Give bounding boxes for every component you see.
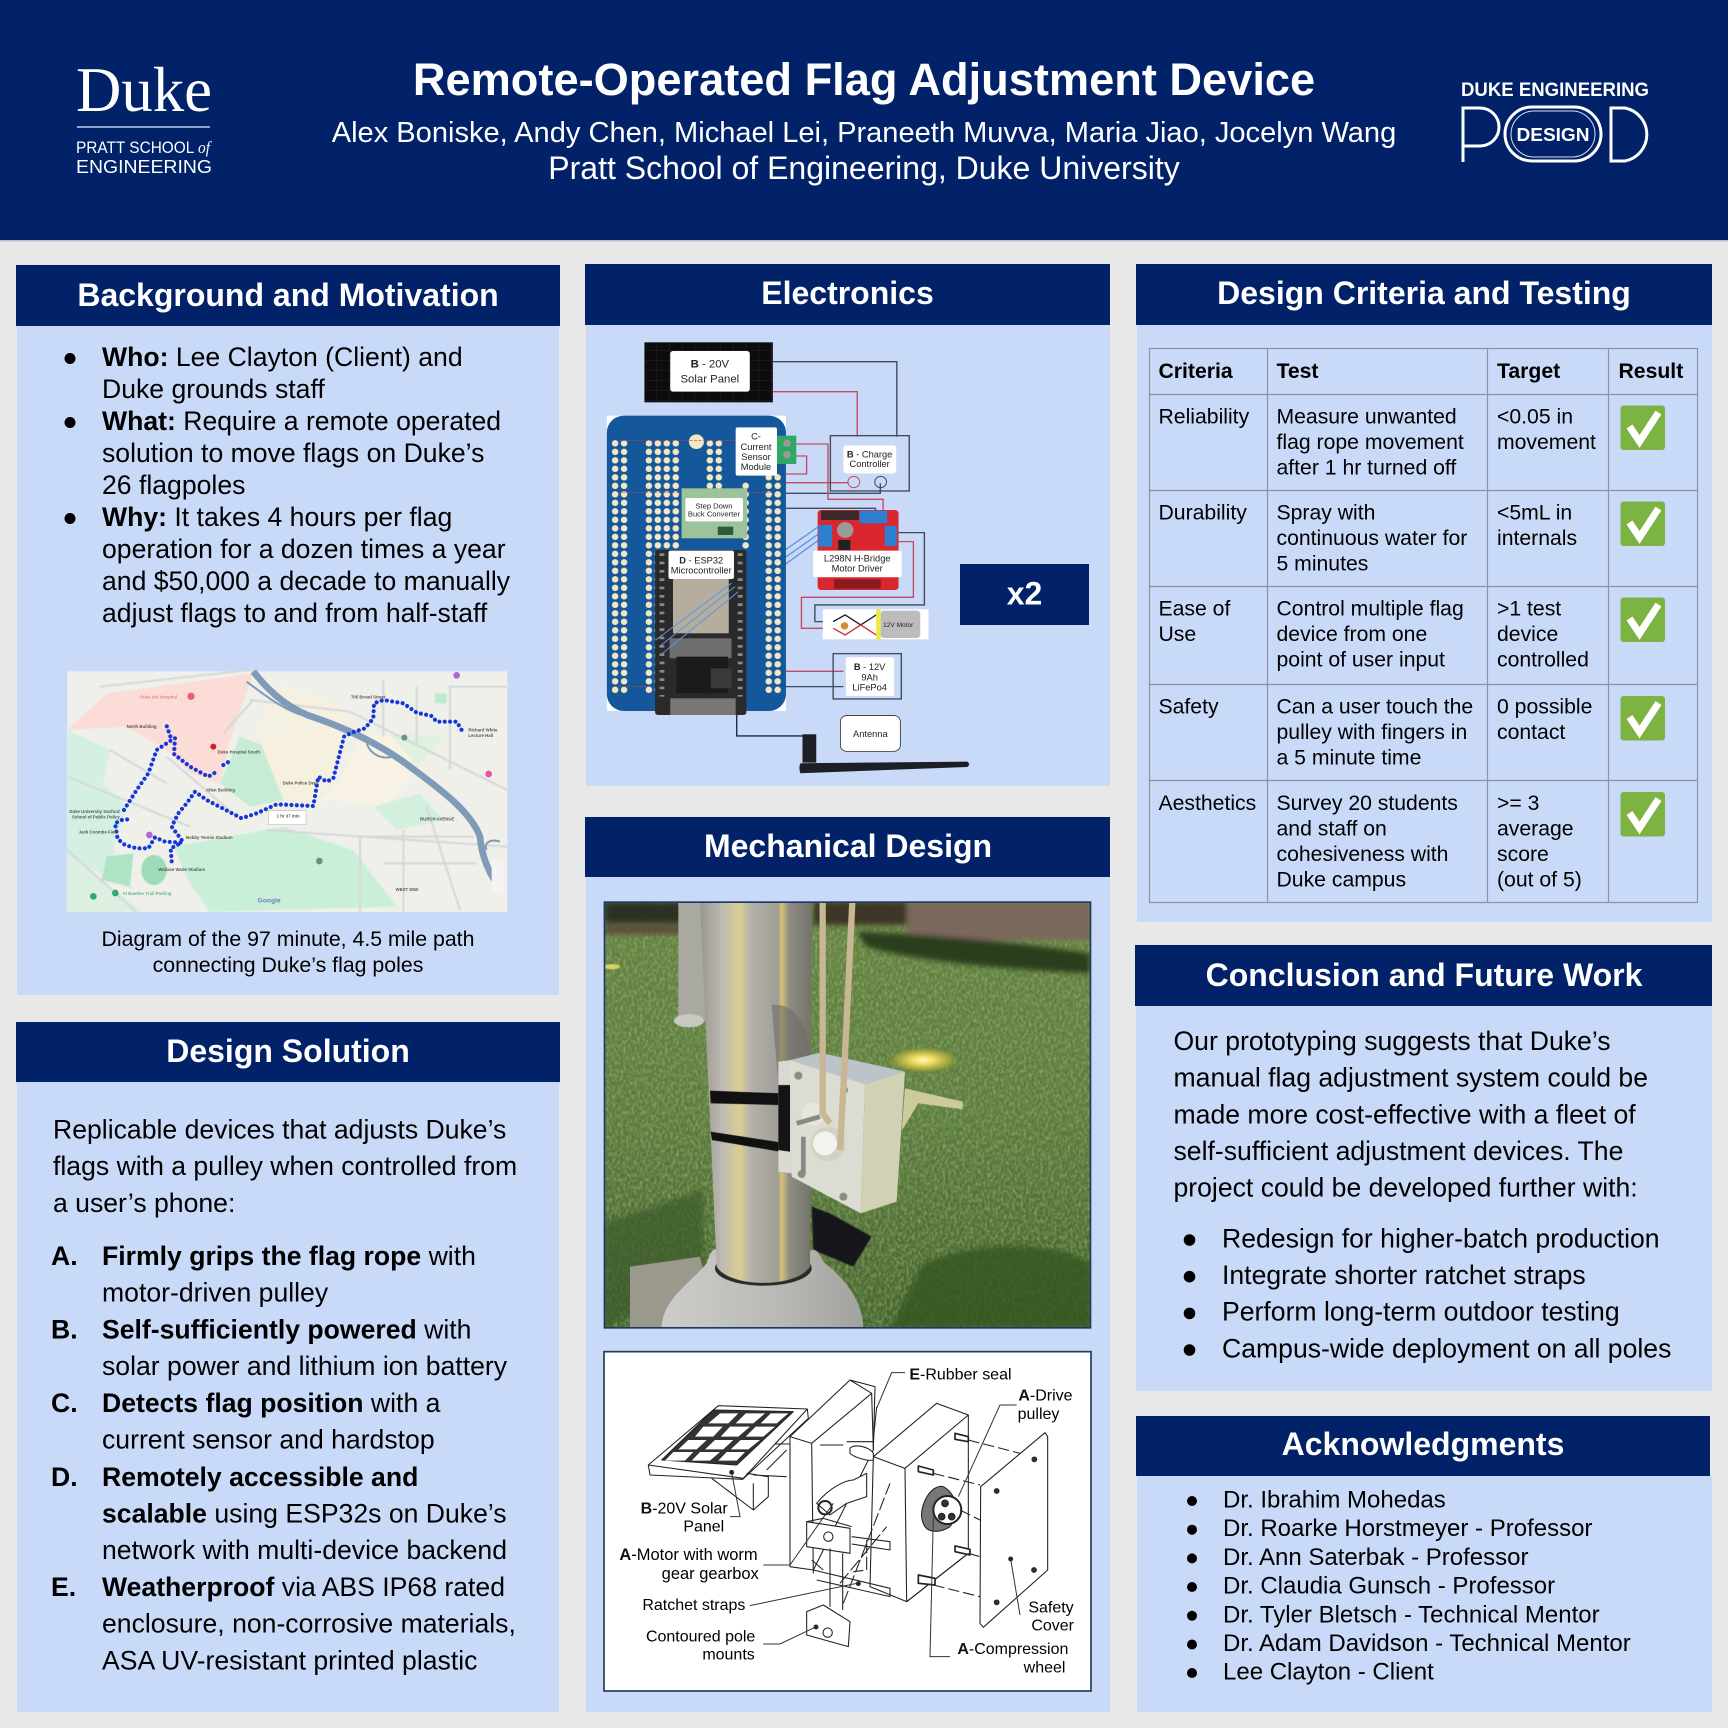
conclusion paragraph: Our prototyping suggests that Duke’s [1174, 1026, 1611, 1056]
row: aesthetics: score [1497, 843, 1549, 866]
future work bullets: Perform long-term outdoor testing [1222, 1297, 1620, 1327]
diagram labels: gear gearbox [662, 1565, 760, 1583]
logo: Duke Pratt School of Engineering [76, 55, 212, 177]
row: safety: Can a user touch the [1276, 696, 1473, 718]
diagram labels: A-Drive [1018, 1387, 1073, 1404]
heading: Acknowledgments [1136, 1416, 1710, 1476]
route dots [115, 700, 462, 861]
map of flag pole route: BURCH AVENUE [420, 817, 454, 822]
conclusion paragraph: made more cost-effective with a fleet of [1174, 1099, 1636, 1129]
heading: Conclusion and Future Work [1135, 945, 1712, 1006]
bullet list: who what why: Why: It takes 4 hours per flag [102, 502, 452, 532]
current sensor module: C- [751, 431, 761, 441]
rear frame [790, 1380, 875, 1570]
main enclosure body [870, 1403, 968, 1602]
row: durability: <5mL in [1497, 502, 1572, 524]
row: aesthetics [1158, 792, 1665, 892]
row: ease of use: Use [1158, 623, 1196, 646]
panel: Design Solution [16, 1022, 560, 1712]
lettered list of features: A. [51, 1241, 78, 1271]
acknowledgment list [1187, 1486, 1631, 1686]
row: reliability: <0.05 in [1497, 406, 1573, 428]
row: safety: pulley with fingers in [1276, 721, 1467, 744]
row: reliability: flag rope movement [1276, 431, 1464, 454]
header banner [0, 0, 1728, 242]
exploded CAD diagram [604, 1352, 1091, 1691]
12V motor: 12V Motor [883, 622, 914, 629]
ESP data wires over module [656, 583, 738, 653]
diagram labels: mounts [702, 1646, 755, 1663]
heading: Background and Motivation [16, 265, 560, 326]
bullet list: who what why: Duke grounds staff [102, 374, 325, 404]
row: safety: contact [1497, 721, 1565, 744]
row: reliability [1158, 406, 1665, 480]
solar panel: Solar Panel [680, 374, 739, 386]
map of flag pole route: North Building [127, 724, 157, 729]
current sensor module: Sensor [741, 452, 771, 462]
diagram labels: Contoured pole [646, 1628, 755, 1645]
map of flag pole route: Duke University Sanford [69, 809, 120, 814]
map of flag pole route [67, 670, 507, 912]
heading: Mechanical Design [585, 817, 1110, 877]
ESP32: Microcontroller [671, 565, 732, 575]
row: safety [1158, 696, 1665, 770]
map of flag pole route: Lecture Hall [468, 733, 493, 738]
motor driver [813, 510, 902, 590]
acknowledgment list: Dr. Ibrahim Mohedas [1223, 1486, 1446, 1514]
inner motor [817, 1473, 867, 1515]
panel: Electronics [585, 264, 1110, 786]
bullet list: who what why [64, 342, 511, 628]
row: durability: Durability [1158, 502, 1247, 524]
charge controller: Controller [850, 459, 890, 469]
bullet list: who what why: What: Require a remote operated [102, 406, 501, 436]
intro text: Replicable devices that adjusts Duke’s [53, 1114, 506, 1144]
battery: 9Ah [861, 672, 878, 682]
diagram labels: B-20V Solar [641, 1500, 728, 1517]
bullet list: who what why: adjust flags to and from half-staff [102, 598, 488, 628]
map of flag pole route: Google [258, 898, 281, 905]
charge controller: B - Charge [847, 449, 892, 459]
battery: B - 12V [854, 662, 886, 672]
battery [833, 654, 901, 699]
row: aesthetics: (out of 5) [1497, 868, 1582, 892]
map caption: connecting Duke’s flag poles [153, 953, 423, 977]
lettered list of features: ASA UV-resistant printed plastic [102, 1646, 477, 1676]
battery: LiFePo4 [852, 682, 887, 692]
bullet list: who what why: 26 flagpoles [102, 470, 245, 500]
intro text: a user’s phone: [53, 1188, 235, 1218]
callout leaders [730, 1373, 1020, 1657]
ESP32 [655, 550, 746, 715]
map of flag pole route: 1 hr 37 min [277, 813, 300, 818]
icon: check mark [1620, 502, 1665, 546]
conclusion paragraph: manual flag adjustment system could be [1174, 1063, 1648, 1093]
map of flag pole route: Duke Hospital South [218, 749, 260, 754]
map of flag pole route: Bobby Tennis Stadium [186, 835, 233, 840]
table header row: Criteria [1158, 360, 1233, 383]
row: aesthetics: Survey 20 students [1276, 792, 1458, 815]
heading: Electronics: Electronics [761, 275, 934, 311]
row: aesthetics: and staff on [1276, 818, 1387, 840]
conclusion paragraph: project could be developed further with: [1174, 1173, 1638, 1203]
row: aesthetics: >= 3 [1497, 792, 1539, 815]
strap bundle [812, 1207, 872, 1267]
heading: Design Solution: Design Solution [166, 1033, 410, 1069]
logo: Duke Engineering Design Pod: DESIGN [1516, 125, 1590, 145]
map of flag pole route: Allen Building [206, 787, 235, 792]
flag pole base [630, 1257, 717, 1328]
lettered list of features: current sensor and hardstop [102, 1424, 435, 1454]
bullet list: who what why: operation for a dozen times a year [102, 534, 506, 564]
future work bullets: Campus-wide deployment on all poles [1222, 1333, 1671, 1363]
lettered list of features: Weatherproof via ABS IP68 rated [102, 1572, 505, 1602]
heading: Design Criteria and Testing: Design Criteria and Testing [1217, 275, 1631, 311]
enclosure [778, 1060, 792, 1173]
wires [656, 362, 924, 736]
row: durability: continuous water for [1276, 527, 1467, 550]
acknowledgment list: Dr. Adam Davidson - Technical Mentor [1223, 1630, 1631, 1657]
acknowledgment list: Lee Clayton - Client [1223, 1659, 1434, 1686]
lettered list of features: Self-sufficiently powered with [102, 1314, 471, 1344]
diagram labels: Panel [683, 1518, 724, 1535]
diagram labels: A-Compression [957, 1641, 1068, 1658]
current sensor module: Module [741, 462, 771, 472]
bullet list: who what why: Who: Lee Clayton (Client) and [102, 342, 463, 372]
acknowledgment list: Dr. Tyler Bletsch - Technical Mentor [1223, 1601, 1600, 1628]
lettered list of features: Remotely accessible and [102, 1462, 418, 1492]
table header row: Target [1497, 360, 1560, 383]
row: reliability: Measure unwanted [1276, 406, 1457, 428]
criteria table [1150, 348, 1698, 902]
row: ease of use: device from one [1276, 623, 1427, 646]
diagram labels [619, 1366, 1075, 1676]
lettered list of features [51, 1241, 516, 1676]
diagram labels: Ratchet straps [642, 1597, 745, 1614]
panel: Mechanical Design [585, 817, 1110, 1712]
diagram labels: pulley [1018, 1406, 1059, 1423]
lettered list of features: network with multi-device backend [102, 1535, 507, 1565]
charge controller [830, 436, 909, 491]
lettered list of features: Detects flag position with a [102, 1388, 441, 1418]
motor driver: L298N H-Bridge [824, 554, 891, 564]
rope and pulleys [802, 1102, 823, 1126]
logo: Duke Pratt School of Engineering: PRATT SCHOOL of [76, 138, 212, 157]
row: ease of use: point of user input [1276, 648, 1445, 672]
future work bullets: Integrate shorter ratchet straps [1222, 1260, 1586, 1290]
row: ease of use: controlled [1497, 648, 1589, 672]
heading: Acknowledgments: Acknowledgments [1282, 1426, 1564, 1462]
acknowledgment list: Dr. Ann Saterbak - Professor [1223, 1544, 1528, 1571]
distant pole [678, 902, 705, 1022]
callout: x2: x2 [1007, 576, 1042, 612]
panel: Conclusion and Future Work [1135, 945, 1712, 1391]
12V motor [823, 609, 929, 639]
heading: Background and Motivation: Background and Motivation [77, 277, 499, 313]
lettered list of features: motor-driven pulley [102, 1278, 329, 1308]
pulley wheels [922, 1486, 956, 1531]
lettered list of features: D. [51, 1462, 78, 1492]
map caption: Diagram of the 97 minute, 4.5 mile path [102, 927, 474, 951]
panel: Design Criteria and Testing [1136, 264, 1712, 922]
icon: check mark [1620, 696, 1665, 740]
row: safety: 0 possible [1497, 696, 1592, 718]
row: ease of use: device [1497, 623, 1558, 646]
diagram labels: Safety [1028, 1600, 1074, 1617]
logo: Duke Pratt School of Engineering: ENGINEERING [76, 156, 212, 177]
map of flag pole route: WEST END [396, 887, 419, 892]
title: Remote-Operated Flag Adjustment Device [413, 54, 1315, 105]
map caption [102, 927, 474, 977]
map of flag pole route: School of Public Policy [72, 814, 120, 819]
diagram labels: Cover [1031, 1618, 1075, 1635]
map of flag pole route: Jack Coombs Field [79, 830, 118, 835]
heading: Design Criteria and Testing [1136, 264, 1712, 325]
intro text: flags with a pulley when controlled from [53, 1151, 517, 1181]
acknowledgment list: Dr. Claudia Gunsch - Professor [1223, 1573, 1555, 1600]
map of flag pole route: Richard White [468, 728, 498, 733]
row: durability: Spray with [1276, 502, 1375, 524]
map of flag pole route: Al Buehler Trail Parking [123, 891, 172, 896]
row: reliability: Reliability [1158, 406, 1250, 428]
table header row: Test [1276, 360, 1318, 383]
protoboard [607, 416, 786, 711]
row: aesthetics: cohesiveness with [1276, 843, 1448, 866]
row: safety: Safety [1158, 696, 1219, 718]
row: safety: a 5 minute time [1276, 746, 1421, 770]
map of flag pole route: Duke Police Dept [283, 780, 319, 785]
lettered list of features: scalable using ESP32s on Duke’s [102, 1498, 507, 1528]
icon: check mark [1620, 406, 1665, 450]
diagram labels: A-Motor with worm [619, 1546, 758, 1564]
table header row [1158, 360, 1683, 383]
bullet list: who what why: solution to move flags on Duke’s [102, 438, 484, 468]
lettered list of features: solar power and lithium ion battery [102, 1351, 508, 1381]
map of flag pole route: Wallace Wade Stadium [158, 867, 205, 872]
icon: check mark [1620, 598, 1665, 642]
lettered list of features: enclosure, non-corrosive materials, [102, 1609, 516, 1639]
row: ease of use: Control multiple flag [1276, 598, 1464, 620]
row: reliability: after 1 hr turned off [1276, 456, 1456, 480]
heading: Electronics [585, 264, 1110, 325]
row: durability: 5 minutes [1276, 552, 1368, 576]
row: ease of use [1158, 598, 1665, 672]
table header row: Result [1618, 360, 1683, 383]
row: aesthetics: Aesthetics [1158, 792, 1256, 815]
buck converter: Buck Converter [688, 510, 741, 519]
safety cover [980, 1433, 1048, 1627]
solar panel [644, 342, 773, 402]
authors: Alex Boniske, Andy Chen, Michael Lei, Praneeth Muvva, Maria Jiao, Jocelyn Wang [332, 117, 1396, 149]
heading: Mechanical Design: Mechanical Design [704, 828, 992, 864]
lettered list of features: Firmly grips the flag rope with [102, 1241, 476, 1271]
heading: Conclusion and Future Work: Conclusion and Future Work [1206, 957, 1643, 993]
current sensor module: Current [740, 442, 772, 452]
motor driver: Motor Driver [832, 564, 883, 574]
map of flag pole route: 705 Broad Street [351, 695, 386, 700]
ESP32: D - ESP32 [679, 555, 723, 565]
lettered list of features: E. [51, 1572, 76, 1602]
row: durability: internals [1497, 527, 1577, 550]
solar panel: B - 20V [691, 358, 730, 370]
map of flag pole route: Duke Uni Hospital [140, 694, 177, 699]
wiring diagram [607, 342, 969, 773]
panel: Acknowledgments [1136, 1416, 1712, 1712]
callout: x2 [960, 564, 1089, 625]
row: aesthetics: average [1497, 818, 1574, 840]
diagram labels: E-Rubber seal [909, 1366, 1012, 1383]
icon: check mark [1620, 792, 1665, 836]
row: durability [1158, 502, 1665, 576]
buck converter: Step Down [695, 502, 732, 511]
buck converter [682, 488, 747, 538]
affiliation: Pratt School of Engineering, Duke University [548, 150, 1180, 186]
conclusion paragraph [1174, 1026, 1648, 1203]
intro text [53, 1114, 517, 1218]
conclusion paragraph: self-sufficient adjustment devices. The [1174, 1136, 1623, 1166]
future work bullets: Redesign for higher-batch production [1222, 1223, 1660, 1253]
photo of installed device [603, 902, 1091, 1328]
lettered list of features: C. [51, 1388, 78, 1418]
logo: Duke Engineering Design Pod: DUKE ENGINEERING [1461, 80, 1649, 101]
bullet list: who what why: and $50,000 a decade to manually [102, 566, 511, 596]
heading: Design Solution [16, 1022, 560, 1082]
antenna [799, 716, 969, 773]
logo: Duke Engineering Design Pod [1461, 80, 1649, 162]
row: reliability: movement [1497, 431, 1596, 454]
lettered list of features: B. [51, 1314, 78, 1344]
standoffs [918, 1433, 970, 1585]
antenna: Antenna [853, 729, 889, 739]
main pole [700, 902, 812, 1283]
panel: Background and Motivation [16, 265, 560, 995]
future work bullets [1184, 1223, 1671, 1363]
logo: Duke Pratt School of Engineering: Duke [76, 55, 212, 125]
acknowledgment list: Dr. Roarke Horstmeyer - Professor [1223, 1515, 1592, 1542]
row: ease of use: Ease of [1158, 598, 1230, 620]
row: aesthetics: Duke campus [1276, 868, 1406, 892]
diagram labels: wheel [1023, 1659, 1065, 1676]
current sensor module [736, 427, 796, 476]
solar panel parts [648, 1406, 808, 1510]
row: ease of use: >1 test [1497, 598, 1561, 620]
